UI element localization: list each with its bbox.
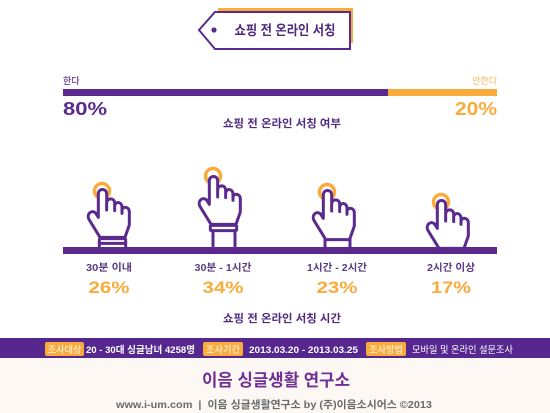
chart: online search yes/no [63, 75, 498, 130]
credits: www.i-um.com | 이음 싱글생활연구소 by (주)이음소시어스 ©2013 [115, 398, 432, 411]
icon: hand under 30 minutes [88, 184, 129, 249]
title tag [199, 8, 353, 49]
label: no: 안한다 [472, 76, 498, 86]
group: 1 to 2 hours: 1시간 - 2시간 [307, 262, 367, 274]
icon: hand 1 to 2 hours [313, 184, 354, 251]
pill: survey period [203, 342, 243, 356]
bar: no 20% [388, 89, 497, 96]
caption: search or not: 쇼핑 전 온라인 서칭 여부 [223, 116, 341, 130]
baseline bar [63, 247, 497, 254]
group: 30 minutes to 1 hour: 30분 - 1시간 [194, 262, 252, 274]
survey period text: 2013.03.20 - 2013.03.25 [249, 345, 359, 356]
group: under 30 minutes: 26% [88, 278, 130, 297]
pill: survey period: 조사기간 [206, 344, 240, 356]
pill: survey method [366, 342, 406, 356]
group: 1 to 2 hours: 23% [316, 278, 358, 297]
survey target text: 20 - 30대 싱글남녀 4258명 [86, 344, 195, 356]
institute name: 이음 싱글생활 연구소 [202, 371, 350, 390]
pill: survey method: 조사방법 [369, 344, 403, 356]
survey info band [0, 338, 550, 358]
group: over 2 hours [427, 261, 475, 297]
group: under 30 minutes: 30분 이내 [86, 261, 132, 274]
label: yes: 한다 [63, 75, 80, 86]
icon: hand 30 minutes to 1 hour [199, 168, 240, 248]
value: 20%: 20% [455, 98, 497, 119]
group: over 2 hours: 2시간 이상 [427, 261, 475, 274]
bar: yes 80% [63, 89, 388, 96]
group: 30 minutes to 1 hour [194, 262, 252, 297]
value: 80%: 80% [63, 98, 107, 119]
group: 30 minutes to 1 hour: 34% [202, 278, 244, 297]
group: under 30 minutes [86, 261, 132, 297]
footer [0, 358, 550, 413]
group: 1 to 2 hours [307, 262, 367, 297]
icon: hand over 2 hours [427, 194, 468, 248]
survey method text: 모바일 및 온라인 설문조사 [412, 344, 513, 356]
caption: search time: 쇼핑 전 온라인 서칭 시간 [223, 311, 341, 325]
title tag: 쇼핑 전 온라인 서칭 [234, 23, 336, 38]
pill: survey target: 조사대상 [48, 344, 82, 356]
group: over 2 hours: 17% [431, 278, 471, 297]
